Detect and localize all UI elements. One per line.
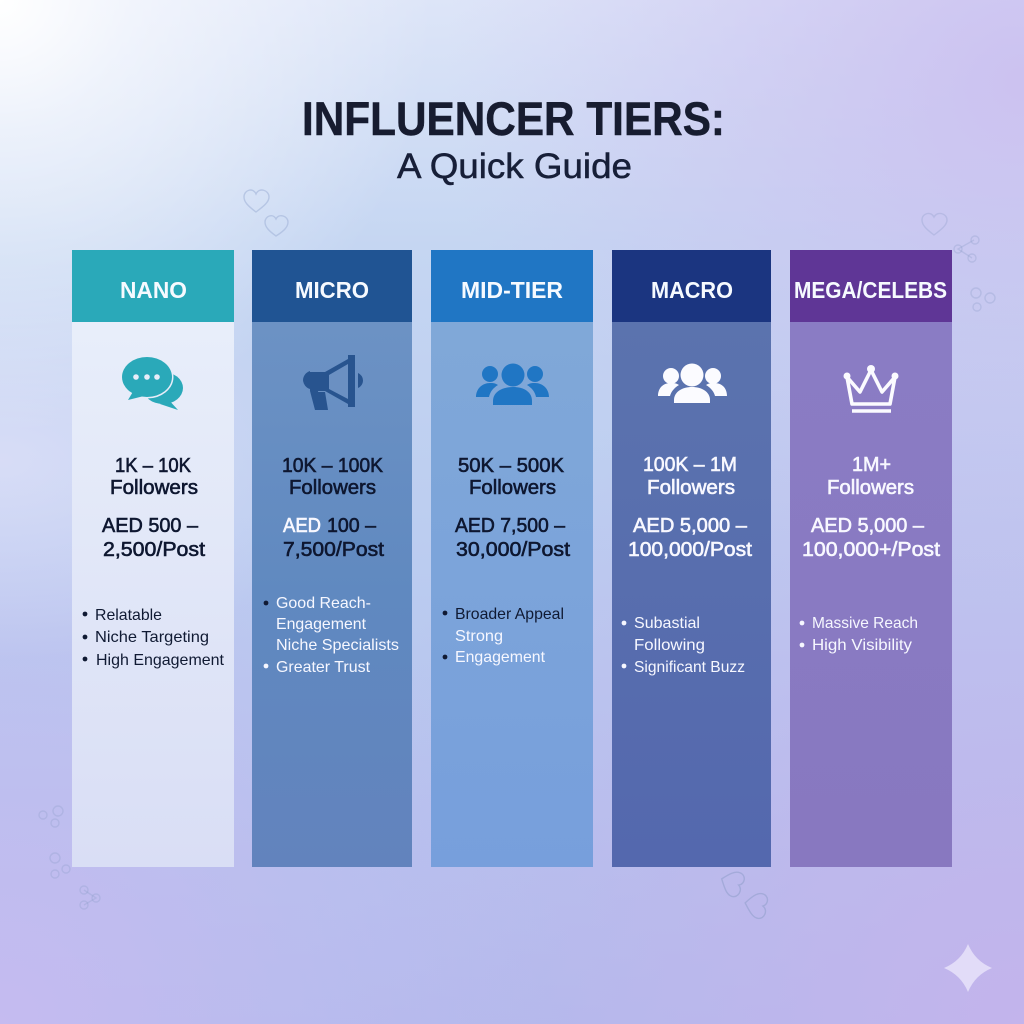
micro price: 7,500/Post [283,539,384,561]
nano bullets: Niche Targeting [95,629,209,646]
macro followers: 100K – 1M [643,454,737,476]
panel: nano [72,250,234,867]
mid-tier price [455,515,570,561]
micro price: 100 – [327,515,377,537]
mega bullets [800,615,918,654]
nano body [72,322,234,867]
macro header [612,250,771,322]
mid-tier label: MID-TIER [461,277,563,303]
micro header [252,250,412,322]
micro followers: Followers [289,477,376,499]
micro price [283,515,384,561]
panel: mid-tier [431,250,593,867]
nano price [102,515,205,561]
mid-tier followers [458,455,565,499]
icon: group [658,364,727,403]
mega followers [827,454,914,499]
mid-tier followers: Followers [469,477,556,499]
mega followers: 1M+ [852,454,891,476]
micro bullets [264,595,399,676]
micro bullets: Good Reach- [276,595,371,612]
subtitle: A Quick Guide [397,147,632,186]
mid-tier bullets: Strong [455,628,503,645]
decorative hearts bottom [717,868,768,919]
nano bullets: Relatable [95,607,162,624]
macro bullets: Following [634,637,705,654]
micro price: AED [283,515,321,537]
decorative hearts top left [244,190,288,236]
macro bullets: Subastial [634,615,700,632]
nano followers: Followers [110,477,198,499]
mega followers: Followers [827,477,914,499]
icon: megaphone [303,355,363,410]
nano price: 2,500/Post [103,539,205,561]
micro bullets: Engagement [276,616,367,633]
mid-tier bullets: Broader Appeal [455,606,564,623]
nano label: NANO [120,277,187,303]
mid-tier price: AED 7,500 – [455,515,566,537]
mid-tier bullets: Engagement [455,649,546,666]
micro body [252,322,412,867]
mid-tier followers: 50K – 500K [458,455,565,477]
icon: crown [844,365,898,411]
mega body [790,322,952,867]
panel: micro [252,250,412,867]
panel: mega/celebs [790,250,952,867]
mega label: MEGA/CELEBS [794,277,947,303]
mega price: AED 5,000 – [811,515,925,537]
nano bullets [83,607,225,669]
micro followers [282,455,384,499]
nano header [72,250,234,322]
micro bullets: Niche Specialists [276,637,399,654]
nano price: AED 500 – [102,515,199,537]
mid-tier header [431,250,593,322]
decorative heart and share icons top right [922,213,995,311]
icon: group [476,364,549,405]
mid-tier body [431,322,593,867]
micro bullets: Greater Trust [276,659,371,676]
micro followers: 10K – 100K [282,455,384,477]
title: INFLUENCER TIERS: [302,92,725,145]
panel: macro [612,250,771,867]
macro followers [643,454,737,499]
nano followers [110,455,198,499]
mid-tier bullets [443,606,564,666]
macro price: AED 5,000 – [633,515,748,537]
mega header [790,250,952,322]
mega bullets: Massive Reach [812,615,918,632]
macro price [628,515,752,561]
mega price: 100,000+/Post [802,539,940,561]
macro followers: Followers [647,477,735,499]
icon: chat bubbles [122,357,183,410]
icon: sparkle [944,944,992,992]
macro label: MACRO [651,277,733,303]
mega price [802,515,940,561]
decorative share icons bottom left [39,806,100,909]
mega bullets: High Visibility [812,637,912,654]
macro bullets [622,615,745,676]
nano bullets: High Engagement [96,652,225,669]
micro label: MICRO [295,277,369,303]
macro body [612,322,771,867]
macro price: 100,000/Post [628,539,752,561]
macro bullets: Significant Buzz [634,659,745,676]
nano followers: 1K – 10K [115,455,192,477]
mid-tier price: 30,000/Post [456,539,570,561]
